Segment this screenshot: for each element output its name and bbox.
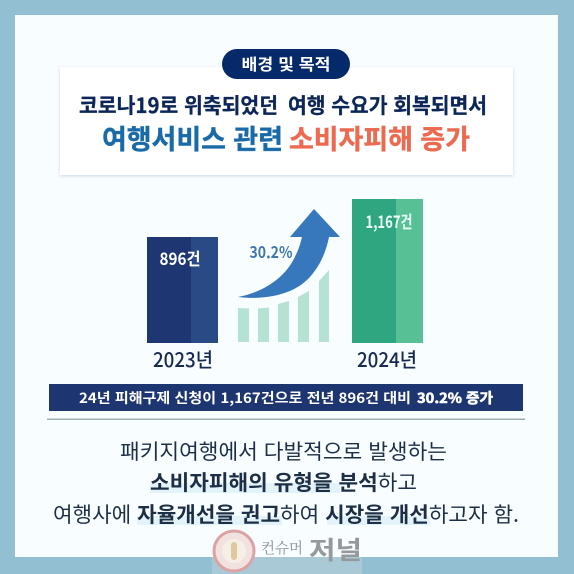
watermark: 컨슈머 저널 [212, 531, 362, 574]
summary bar [49, 384, 523, 411]
label: 2024년: 2024년 [357, 344, 417, 373]
badge: 배경 및 목적 [222, 49, 350, 79]
growth mini bars [238, 270, 329, 342]
description line 1: 패키지여행에서 다발적으로 발생하는 [120, 436, 447, 466]
watermark wordmark: 컨슈머 [261, 537, 303, 558]
bar: 2023 [147, 237, 218, 343]
divider [47, 418, 525, 420]
bar: 2023: 896건 [160, 245, 200, 270]
title line 1 [79, 90, 487, 120]
highlight strips [137, 483, 430, 525]
title line 2: 여행서비스 관련 [102, 118, 283, 157]
label: 2023년: 2023년 [153, 344, 213, 373]
title line 2 highlight: 소비자피해 증가 [289, 118, 470, 157]
title card [60, 49, 513, 175]
description line 2: 소비자피해의 유형을 분석하고 [150, 467, 417, 497]
label: 30.2%: 30.2% [250, 239, 292, 263]
description text [53, 436, 519, 529]
description line 3: 여행사에 자율개선을 권고하여 시장을 개선하고자 함. [53, 499, 519, 529]
bar: 2024: 1,167건 [366, 208, 412, 233]
watermark: 컨슈머 저널: 저널 [309, 531, 362, 567]
badge: 배경 및 목적: 배경 및 목적 [242, 51, 330, 75]
watermark seal [214, 531, 254, 571]
bar: 2024 [352, 199, 423, 343]
summary bar: 24년 피해구제 신청이 1,167건으로 전년 896건 대비 [79, 388, 411, 408]
summary bar: 30.2% 증가 [417, 388, 493, 408]
arrow: upward growth [238, 209, 340, 298]
title line 1: 코로나19로 위축되었던 [79, 90, 278, 120]
title line 1: 여행 수요가 회복되면서 [288, 90, 487, 120]
